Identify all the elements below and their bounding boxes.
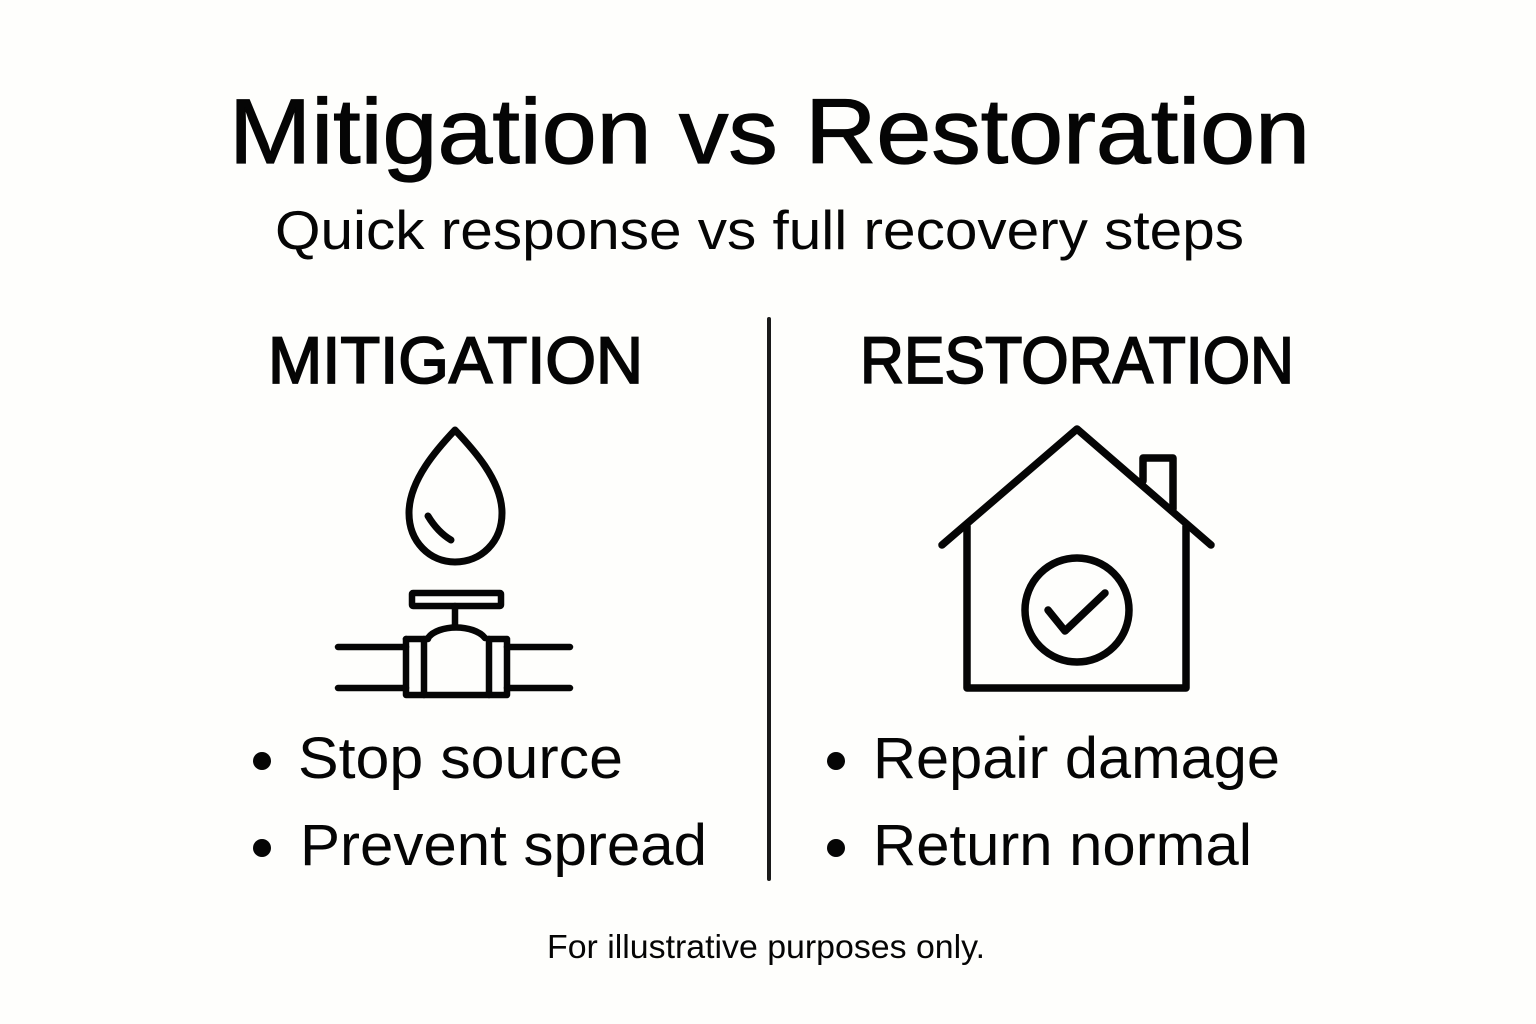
bullet: stop source: Stop source bbox=[298, 726, 623, 791]
center divider bbox=[767, 317, 771, 881]
panel: mitigation bbox=[253, 323, 707, 878]
panel: restoration bbox=[827, 323, 1294, 878]
bullet: prevent spread: Prevent spread bbox=[300, 813, 707, 878]
bullet: repair damage: Repair damage bbox=[873, 726, 1280, 791]
icon: pipe valve bbox=[338, 593, 570, 695]
bullet list: mitigation bbox=[253, 726, 707, 878]
bullet: return normal: Return normal bbox=[873, 813, 1252, 878]
title: Mitigation vs Restoration bbox=[229, 81, 1310, 183]
bullet list: restoration bbox=[827, 726, 1280, 878]
heading: mitigation: MITIGATION bbox=[268, 323, 643, 397]
subtitle: Quick response vs full recovery steps bbox=[275, 199, 1244, 261]
footnote: For illustrative purposes only. bbox=[547, 928, 985, 965]
heading: restoration: RESTORATION bbox=[860, 323, 1294, 397]
icon: water drop bbox=[409, 430, 502, 562]
icon: house with check bbox=[942, 429, 1211, 688]
